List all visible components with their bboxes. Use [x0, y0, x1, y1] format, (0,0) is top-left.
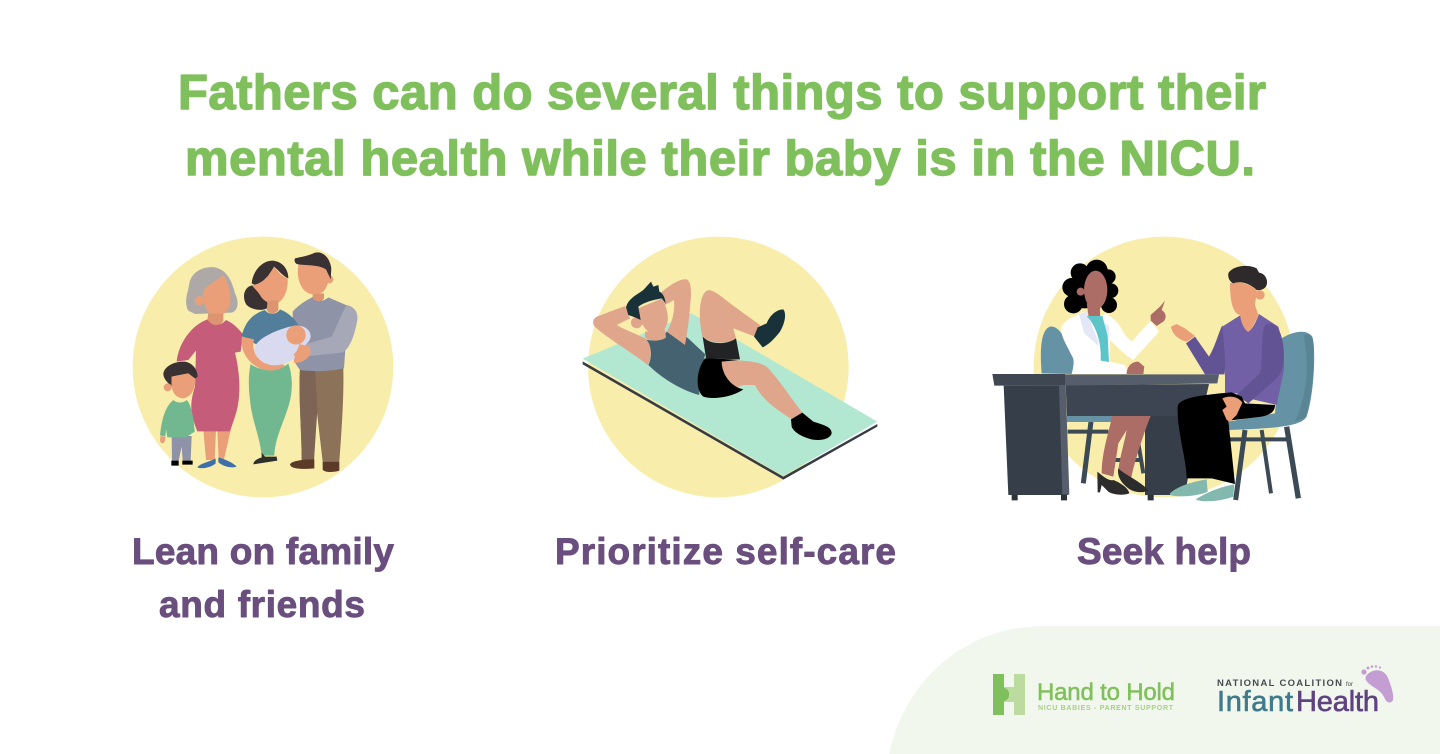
mother top: [242, 309, 299, 347]
grandmother shoes: [197, 457, 237, 468]
head: [631, 298, 668, 333]
mother face: [252, 267, 288, 304]
torso: [644, 331, 705, 395]
father sweater: [293, 297, 348, 371]
patient trousers: [1178, 392, 1275, 484]
mat edge: [583, 361, 877, 480]
illustration: exercise: [583, 237, 877, 497]
far shoe: [791, 413, 832, 440]
grandmother hair: [186, 267, 238, 314]
doctor hands: [1127, 301, 1166, 374]
title: [178, 66, 1266, 186]
father head: [298, 261, 333, 294]
father neck: [313, 293, 324, 301]
footprint: [1365, 670, 1393, 703]
doctor chair: [1041, 327, 1075, 374]
logo wordmark: Hand to Hold: [1037, 679, 1175, 706]
desk back: [1145, 416, 1198, 495]
title: mental health while their baby is in the NICU.: [185, 132, 1255, 186]
logo: National Coalition for Infant Health: [1217, 665, 1393, 718]
child shoes: [171, 461, 193, 466]
doctor hair: [1062, 260, 1118, 313]
label: family: [132, 531, 394, 625]
label: self-care: Prioritize self-care: [555, 531, 896, 572]
arms: [593, 279, 691, 365]
patient skin: [1171, 282, 1265, 422]
logo mark: [993, 674, 1009, 715]
illustration: counselling: [992, 237, 1314, 501]
logo: Hand to Hold: [993, 674, 1175, 715]
wordmark: Infant: [1217, 686, 1293, 718]
baby: [254, 326, 311, 365]
doctor head: [1077, 271, 1107, 319]
doctor shoes: [1097, 468, 1148, 495]
label: family: Lean on family: [132, 531, 394, 572]
mother shoe: [253, 453, 277, 464]
mother hair: [244, 261, 288, 310]
father hair: [295, 252, 331, 279]
patient sweater: [1222, 314, 1284, 405]
desk panel: [1066, 384, 1209, 416]
doctor legs: [1102, 416, 1151, 478]
shorts hem: [703, 337, 740, 359]
desk pedestal: [1004, 386, 1068, 495]
desk top: [992, 374, 1065, 386]
child head: [164, 373, 195, 398]
mother neck: [267, 301, 278, 313]
mother arm: [242, 337, 285, 371]
logo: National Coalition for Infant Health: Health: [1296, 686, 1379, 718]
father shoes: [290, 459, 339, 472]
small heading: NATIONAL COALITION: [1217, 678, 1342, 689]
illustration: family: [133, 237, 393, 497]
doctor lapels: [1079, 312, 1109, 346]
patient arms: [1186, 324, 1284, 403]
doctor top: [1087, 316, 1109, 362]
chair legs: [1068, 418, 1298, 500]
child trousers: [172, 436, 192, 461]
father trousers: [300, 368, 343, 462]
logo: National Coalition for Infant Health: for: [1346, 682, 1353, 688]
mother trousers: [249, 363, 292, 456]
label: seek help: Seek help: [1077, 531, 1251, 572]
father arm: [303, 305, 358, 356]
patient hair: [1228, 266, 1267, 290]
patient shoes: [1170, 479, 1234, 501]
child sweater: [160, 400, 195, 437]
title: Fathers can do several things to support their: [178, 66, 1266, 120]
raised shoe: [754, 309, 785, 347]
grandmother dress: [177, 319, 243, 431]
doctor coat: [1061, 312, 1159, 374]
child hair: [163, 362, 198, 387]
patient chair: [1228, 332, 1314, 430]
shorts: [698, 358, 743, 398]
logo tagline: NICU BABIES - PARENT SUPPORT: [1038, 705, 1174, 712]
mat: [583, 313, 877, 476]
father hand: [293, 344, 311, 363]
raised thigh: [700, 290, 760, 343]
grandmother head: [195, 275, 231, 326]
label: family: and friends: [159, 584, 365, 625]
grandmother legs: [203, 430, 231, 460]
footer panel: [889, 626, 1440, 754]
neck: [645, 329, 666, 341]
hair: [626, 282, 666, 320]
far leg: [722, 360, 802, 419]
